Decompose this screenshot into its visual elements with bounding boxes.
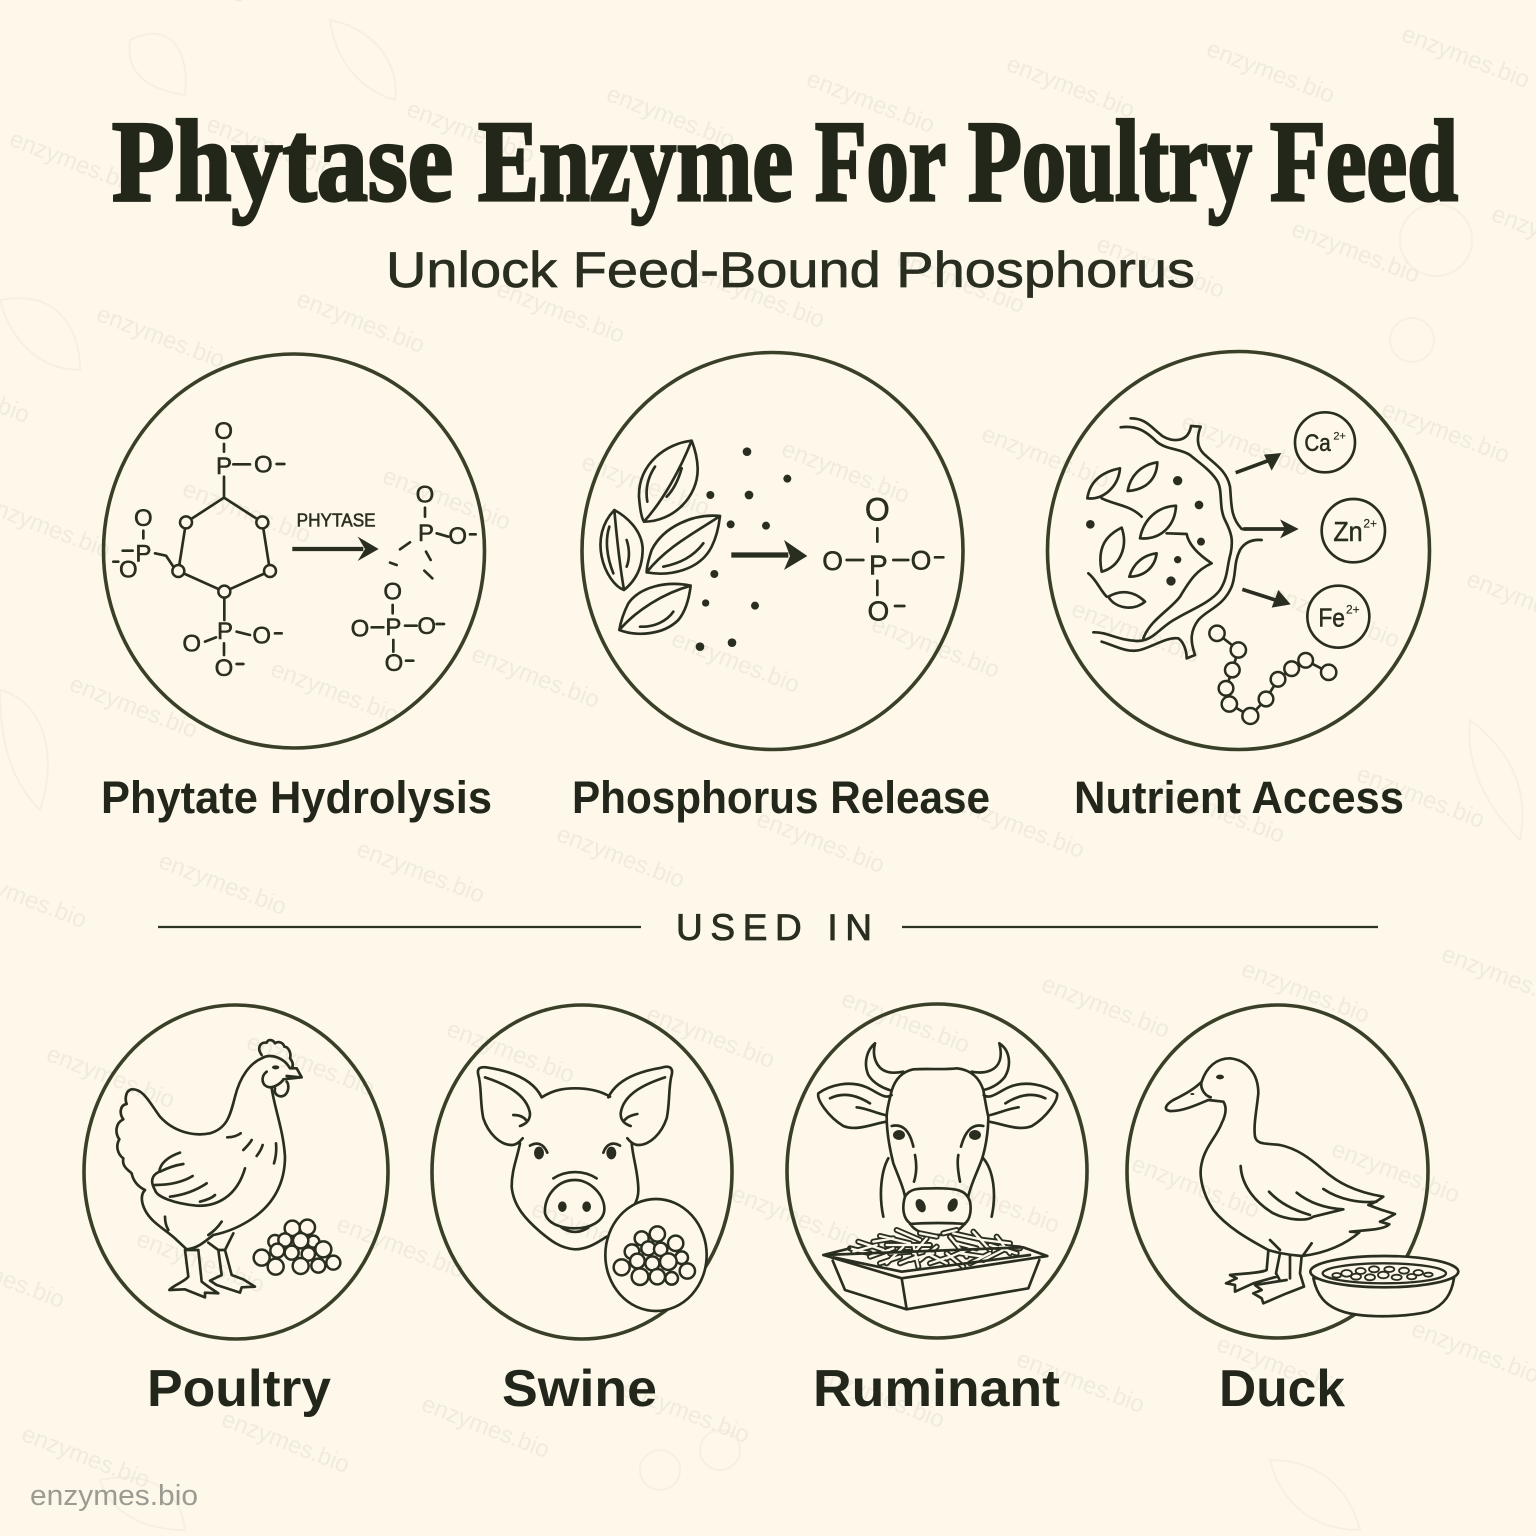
text: enzymes.bio: [1178, 408, 1313, 482]
phosphate molecule: P: [869, 549, 888, 580]
released phosphate fragments: O: [383, 578, 402, 605]
text: enzymes.bio: [1153, 775, 1288, 849]
title: Poultry: [968, 98, 1252, 226]
subtitle: Unlock Feed-Bound Phosphorus: [386, 242, 1195, 298]
section divider: used in: USED IN: [676, 907, 872, 948]
label: duck: Duck: [1219, 1360, 1345, 1418]
mineral: iron: [1307, 586, 1369, 648]
text: enzymes.bio: [1268, 580, 1403, 654]
text: enzymes.bio: [928, 1165, 1063, 1239]
circle frame: [104, 354, 484, 748]
icon: duck with feed bowl: [1166, 1058, 1458, 1316]
text: enzymes.bio: [179, 475, 314, 549]
text: enzymes.bio: [1328, 1135, 1463, 1209]
text: enzymes.bio: [493, 275, 628, 349]
circle frame: [582, 352, 963, 750]
text: enzymes.bio: [1378, 395, 1513, 469]
diagram: cell wall and minerals: [1086, 412, 1385, 724]
phosphate molecule: O: [822, 546, 843, 576]
text: enzymes.bio: [443, 1015, 578, 1089]
feed bowl: [1310, 1256, 1458, 1316]
text: enzymes.bio: [133, 1225, 268, 1299]
panel: duck: [1127, 1005, 1458, 1338]
text: enzymes.bio: [1353, 760, 1488, 834]
phosphate molecule: O: [867, 596, 889, 627]
text: enzymes.bio: [1038, 970, 1173, 1044]
mineral: calcium: 2+: [1333, 430, 1346, 442]
panel: swine: [432, 1005, 732, 1339]
icon: pig head with feed: [478, 1067, 707, 1311]
text: enzymes.bio: [868, 610, 1003, 684]
diagram: seeds releasing phosphate: [600, 441, 943, 651]
mineral: calcium: Ca: [1304, 430, 1331, 457]
text: enzymes.bio: [728, 1180, 863, 1254]
diagram: phytate molecule and phytase reaction: P: [135, 541, 151, 568]
released phosphate fragments: O: [448, 523, 467, 550]
diagram: phytate molecule and phytase reaction: O: [182, 631, 201, 658]
text: enzymes.bio: [838, 985, 973, 1059]
panel: poultry: [84, 1005, 388, 1339]
footer brand: enzymes.bio: [30, 1480, 198, 1512]
text: enzymes.bio: [778, 435, 913, 509]
text: enzymes.bio: [155, 847, 290, 921]
released phosphate fragments: O: [385, 650, 403, 677]
text: enzymes.bio: [403, 95, 538, 169]
panel: phosphorus release: [582, 352, 963, 750]
text: enzymes.bio: [468, 640, 603, 714]
label: ruminant: Ruminant: [813, 1360, 1060, 1418]
panel: phytate hydrolysis: [104, 354, 484, 748]
text: enzymes.bio: [1068, 595, 1203, 669]
label: nutrient access: Nutrient Access: [1074, 772, 1404, 823]
text: enzymes.bio: [893, 245, 1028, 319]
title: Phytase: [112, 98, 453, 226]
diagram: phytate molecule and phytase reaction: O: [119, 556, 138, 583]
text: enzymes.bio: [203, 110, 338, 184]
feed bubble: [605, 1199, 707, 1311]
text: enzymes.bio: [528, 1195, 663, 1269]
text: enzymes.bio: [418, 1390, 553, 1464]
released phosphate fragments: O: [351, 616, 369, 643]
text: enzymes.bio: [1013, 1345, 1148, 1419]
icon: cow head with feed tray: [818, 1043, 1057, 1309]
phosphate molecule: [822, 491, 943, 627]
feed tray with hay: [823, 1230, 1047, 1309]
mineral: zinc: Zn: [1333, 516, 1363, 547]
circle frame: [1127, 1005, 1428, 1338]
text: enzymes.bio: [1288, 215, 1423, 289]
text: enzymes.bio: [553, 820, 688, 894]
text: enzymes.bio: [333, 1210, 468, 1284]
text: enzymes.bio: [618, 1375, 753, 1449]
text: enzymes.bio: [693, 260, 828, 334]
text: enzymes.bio: [1128, 1150, 1263, 1224]
released phosphate fragments: P: [418, 520, 434, 547]
phosphate molecule: O: [865, 491, 890, 527]
circle frame: [787, 1004, 1087, 1338]
text: enzymes.bio: [43, 1040, 178, 1114]
text: enzymes.bio: [643, 1000, 778, 1074]
mineral: iron: 2+: [1346, 602, 1360, 616]
text: enzymes.bio: [978, 420, 1113, 494]
title: Feed: [1270, 98, 1458, 226]
text: enzymes.bio: [953, 790, 1088, 864]
mineral: calcium: [1295, 412, 1355, 472]
released phosphate fragments: [351, 482, 476, 677]
text: enzymes.bio: [668, 625, 803, 699]
phosphate molecule: O: [911, 546, 931, 576]
label: poultry: Poultry: [147, 1360, 331, 1418]
text: enzymes.bio: [267, 655, 402, 729]
diagram: phytate molecule and phytase reaction: O: [254, 452, 273, 479]
circle frame: [1048, 352, 1430, 750]
text: enzymes.bio: [1213, 1330, 1348, 1404]
feed pellets: [254, 1220, 340, 1275]
text: enzymes.bio: [803, 65, 938, 139]
icon: seeds: [600, 441, 720, 634]
text: enzymes.bio: [1398, 20, 1533, 94]
released phosphate fragments: P: [385, 614, 401, 641]
diagram: phytate molecule and phytase reaction: O: [214, 418, 233, 445]
icon: cell wall: [1088, 418, 1262, 658]
title: For: [815, 98, 946, 226]
label: phytate hydrolysis: Phytate Hydrolysis: [101, 772, 492, 823]
title: [112, 98, 1458, 226]
released phosphate fragments: O: [416, 482, 434, 509]
mineral: iron: Fe: [1318, 603, 1345, 633]
text: enzymes.bio: [243, 1028, 378, 1102]
text: enzymes.bio: [813, 1360, 948, 1434]
diagram: phytate molecule and phytase reaction: O: [134, 505, 153, 532]
icon: seed fragments: [1087, 462, 1176, 608]
circle frame: [84, 1005, 388, 1339]
arrow: [731, 540, 807, 570]
label: phosphorus release: Phosphorus Release: [572, 772, 990, 823]
panel: nutrient access: [1048, 352, 1430, 750]
released phosphate fragments: O: [417, 613, 436, 640]
mineral: zinc: 2+: [1363, 517, 1377, 531]
label: swine: Swine: [502, 1360, 657, 1418]
icon: hen with feed pellets: [116, 1040, 340, 1297]
circle frame: [432, 1005, 732, 1339]
text: enzymes.bio: [353, 835, 488, 909]
title: Enzyme: [478, 98, 793, 226]
icon: amino acid chain: [1209, 626, 1336, 724]
diagram: phytate molecule and phytase reaction: P: [217, 618, 233, 645]
diagram: phytate molecule and phytase reaction: O: [215, 655, 233, 682]
arrows: [1236, 453, 1299, 608]
text: enzymes.bio: [603, 80, 738, 154]
text: enzymes.bio: [578, 448, 713, 522]
mineral: zinc: [1322, 499, 1385, 562]
panel: ruminant: [787, 1004, 1087, 1338]
text: enzymes.bio: [1238, 955, 1373, 1029]
text: enzymes.bio: [293, 285, 428, 359]
arrow: [292, 537, 379, 561]
text: enzymes.bio: [379, 462, 514, 536]
label: PHYTASE: PHYTASE: [297, 510, 376, 531]
text: enzymes.bio: [18, 1420, 153, 1494]
text: enzymes.bio: [66, 670, 201, 744]
text: enzymes.bio: [1093, 230, 1228, 304]
text: enzymes.bio: [1203, 35, 1338, 109]
diagram: phytate molecule and phytase reaction: [113, 418, 476, 682]
text: enzymes.bio: [753, 805, 888, 879]
diagram: phytate molecule and phytase reaction: P: [216, 453, 232, 480]
text: enzymes.bio: [6, 125, 141, 199]
diagram: phytate molecule and phytase reaction: O: [252, 622, 271, 649]
phosphate dots: [696, 447, 791, 651]
text: enzymes.bio: [1003, 50, 1138, 124]
text: enzymes.bio: [93, 300, 228, 374]
text: enzymes.bio: [218, 1405, 353, 1479]
